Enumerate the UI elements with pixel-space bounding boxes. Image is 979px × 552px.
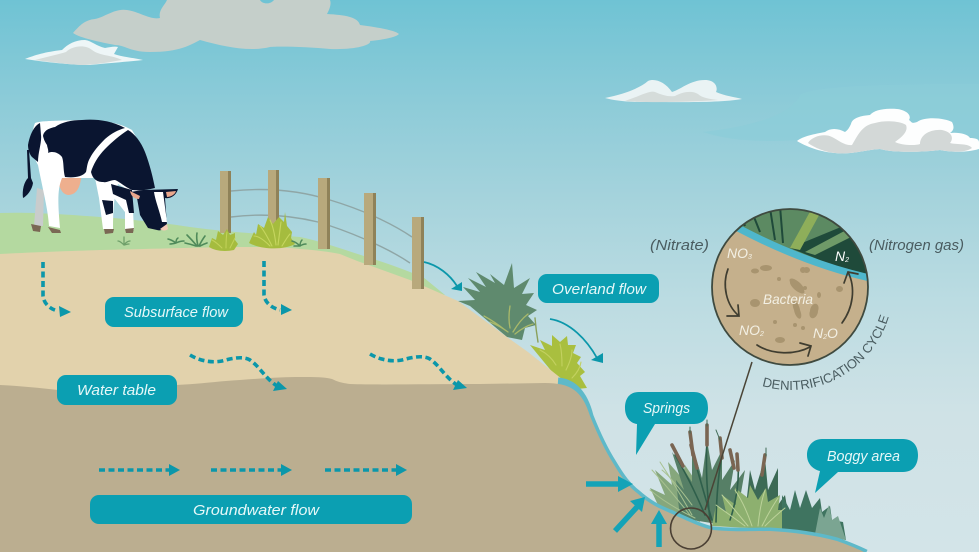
far hind leg bbox=[34, 188, 44, 226]
small cloud centre bbox=[605, 80, 742, 102]
yellow-green tussock on slope bbox=[530, 318, 587, 390]
chemical labels: Bacteria bbox=[763, 291, 813, 307]
chemical labels: N bbox=[813, 325, 823, 341]
subsurface flow arrow 2 bbox=[264, 261, 292, 315]
far front leg bbox=[114, 187, 134, 230]
fence post 5 bbox=[412, 217, 424, 289]
label: subsurface flow: Subsurface flow bbox=[124, 304, 229, 321]
cycle arrows bbox=[725, 269, 858, 356]
callout: boggy area: Boggy area bbox=[827, 448, 900, 465]
chemical labels: N bbox=[835, 248, 845, 264]
large white cloud right bbox=[797, 109, 979, 153]
udder bbox=[58, 178, 81, 195]
label: groundwater flow: Groundwater flow bbox=[193, 502, 320, 519]
label: water table bbox=[57, 375, 177, 405]
small locator circle bbox=[670, 508, 712, 549]
chemical labels bbox=[727, 245, 849, 341]
cow black patches bbox=[28, 120, 155, 215]
large grey cloud bbox=[73, 0, 399, 52]
soil cross-section bbox=[712, 231, 868, 364]
fence bbox=[220, 170, 424, 289]
subsurface flow arrow 1 bbox=[43, 262, 71, 317]
water band bbox=[738, 228, 870, 278]
fence post 3 bbox=[318, 178, 330, 249]
chemical labels: 2 bbox=[844, 257, 849, 264]
circle outline bbox=[712, 209, 868, 365]
callout: springs: Springs bbox=[643, 400, 690, 417]
icon: grazing cow bbox=[23, 120, 178, 234]
wetland reeds and sedges bbox=[650, 420, 846, 540]
fence post 2 bbox=[268, 170, 279, 225]
cow hooves bbox=[31, 224, 134, 234]
nitrate label: (Nitrate) bbox=[650, 237, 709, 254]
white body bbox=[32, 120, 155, 229]
spring inflow arrow 3 bbox=[651, 510, 667, 547]
callout: springs bbox=[625, 392, 708, 455]
subsurface flow arrow 3 bbox=[190, 355, 287, 391]
overland flow arrow upper bbox=[424, 262, 462, 291]
nitrogen gas label: (Nitrogen gas) bbox=[869, 237, 964, 254]
faint sky swirl bbox=[703, 84, 979, 150]
cow tail bbox=[23, 150, 33, 198]
groundwater flow arrow 1 bbox=[99, 464, 180, 476]
label: overland flow bbox=[538, 274, 659, 303]
label: water table: Water table bbox=[77, 382, 156, 399]
label: subsurface flow bbox=[105, 297, 243, 327]
chemical labels: O bbox=[827, 325, 838, 341]
callout: boggy area bbox=[807, 439, 918, 493]
bacteria specks bbox=[750, 265, 843, 343]
groundwater flow arrow 3 bbox=[325, 464, 407, 476]
seep water strip bbox=[558, 381, 866, 552]
green pasture bbox=[0, 213, 445, 295]
chemical labels: NO bbox=[739, 322, 760, 338]
denitrification cycle arc label: DENITRIFICATION CYCLE bbox=[763, 314, 889, 390]
spring inflow arrow 1 bbox=[586, 476, 633, 492]
small cloud left bbox=[25, 40, 143, 65]
sandy subsoil bbox=[0, 247, 590, 552]
chemical labels: NO bbox=[727, 245, 748, 261]
chemical labels: 3 bbox=[748, 254, 752, 261]
spring inflow arrow 2 bbox=[615, 497, 645, 531]
subsurface flow arrow 4 bbox=[370, 354, 467, 390]
pasture grass tufts bbox=[118, 212, 306, 251]
groundwater soil bbox=[0, 377, 866, 552]
denitrification circle panel bbox=[710, 205, 870, 370]
label: groundwater flow bbox=[90, 495, 412, 524]
chemical labels: 2 bbox=[822, 334, 827, 341]
zoom connector line bbox=[705, 362, 752, 510]
chemical labels: 2 bbox=[759, 331, 764, 338]
fence post 4 bbox=[364, 193, 376, 265]
dark tussock on slope bbox=[458, 263, 537, 340]
plant layer bbox=[742, 210, 866, 274]
label: overland flow: Overland flow bbox=[552, 281, 647, 298]
fence wires bbox=[231, 190, 412, 263]
groundwater flow arrow 2 bbox=[211, 464, 292, 476]
fence post 1 bbox=[220, 171, 231, 233]
overland flow arrow lower bbox=[550, 319, 603, 363]
cow head bbox=[130, 189, 178, 230]
